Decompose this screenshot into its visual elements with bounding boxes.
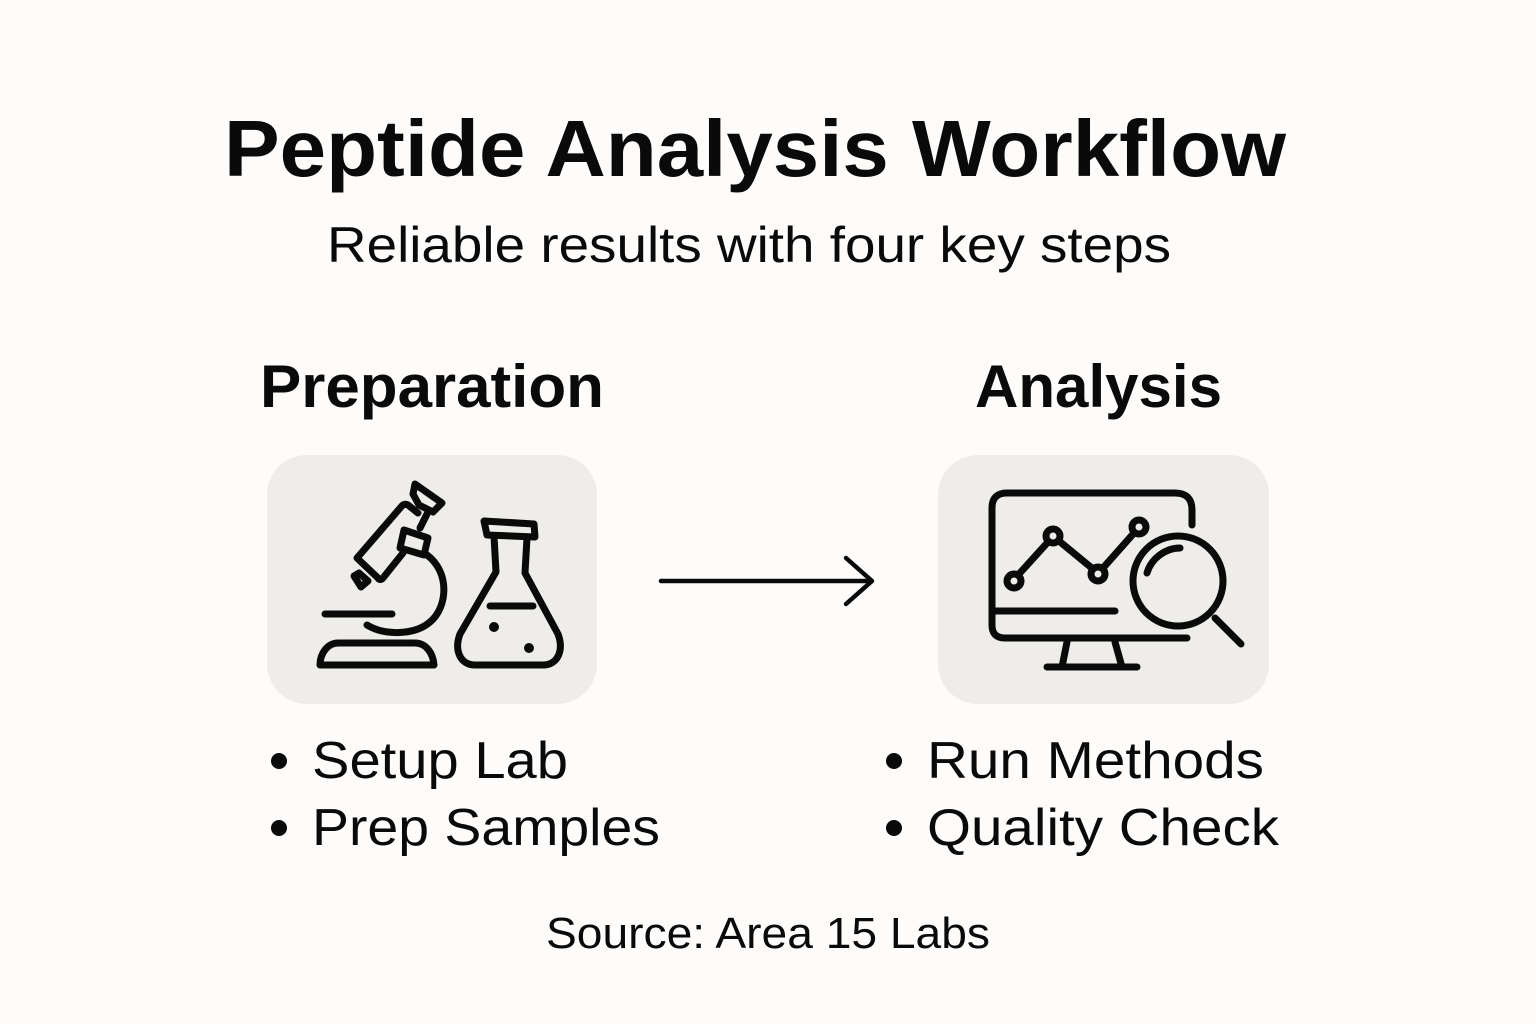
list: preparation: Prep Samples: [312, 799, 660, 857]
list: analysis: Run Methods: [927, 732, 1264, 790]
list: preparation: [271, 732, 660, 857]
subtitle: Reliable results with four key steps: [327, 217, 1171, 273]
panel: analysis icon: [938, 455, 1269, 704]
title: Peptide Analysis Workflow: [224, 104, 1287, 193]
icon: flask: [458, 521, 560, 665]
list: analysis: Quality Check: [927, 799, 1280, 857]
source: Source: Area 15 Labs: [546, 909, 990, 958]
icon: monitor with chart: [992, 493, 1192, 667]
heading: preparation: Preparation: [260, 353, 604, 420]
list: preparation: Setup Lab: [312, 732, 568, 790]
panel: preparation icon: [267, 455, 597, 704]
icon: microscope: [320, 484, 444, 665]
heading: analysis: Analysis: [975, 353, 1222, 420]
arrow: [661, 558, 872, 604]
list: analysis: [886, 732, 1280, 857]
icon: magnifier: [1133, 536, 1241, 644]
